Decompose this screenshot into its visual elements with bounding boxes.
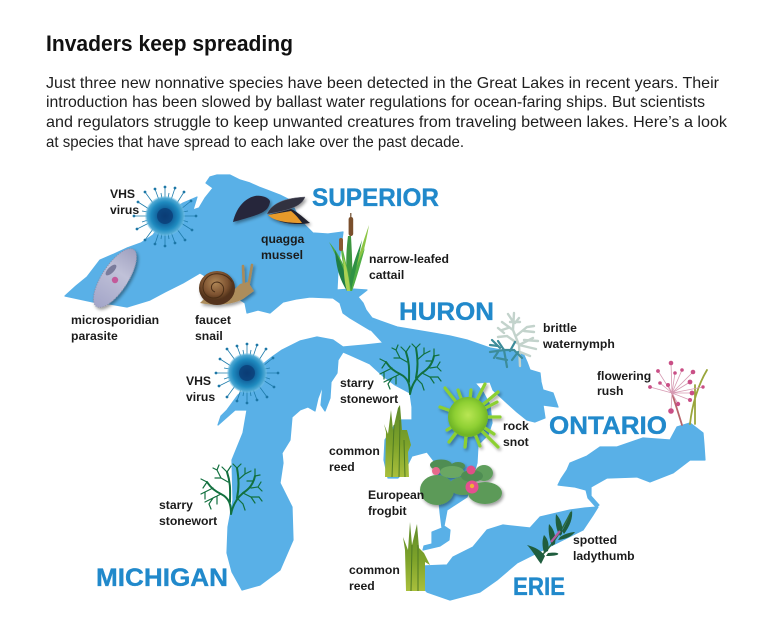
icon: common reed (Erie) <box>403 522 430 591</box>
label: common reed (Huron): common <box>329 444 380 458</box>
label: spotted ladythumb <box>573 533 635 563</box>
label: VHS virus (Michigan): virus <box>186 390 215 404</box>
intro text block: and regulators struggle to keep unwanted creatures from traveling between lakes. Here’s a look <box>46 114 727 131</box>
icon: VHS virus (Michigan) <box>215 343 279 404</box>
label: narrow-leafed cattail: cattail <box>369 268 404 282</box>
heading: Superior: SUPERIOR <box>312 184 439 212</box>
label: narrow-leafed cattail <box>369 252 449 282</box>
label: starry stonewort (Michigan): starry <box>159 498 193 512</box>
label: common reed (Erie) <box>349 563 400 593</box>
label: flowering rush <box>597 369 651 398</box>
label: common reed (Huron): reed <box>329 460 355 474</box>
map of the Great Lakes <box>65 175 705 600</box>
label: starry stonewort (Huron) <box>340 376 398 406</box>
icon: VHS virus (Superior) <box>133 186 197 247</box>
label: brittle waternymph: waternymph <box>542 337 615 351</box>
title: Invaders keep spreading <box>46 31 293 56</box>
icon: rock snot <box>440 384 500 447</box>
intro text block <box>46 75 727 151</box>
label: microsporidian parasite <box>71 313 159 343</box>
icon: microsporidian parasite <box>86 242 144 314</box>
icon: European frogbit <box>420 460 502 505</box>
intro text block: Just three new nonnative species have been detected in the Great Lakes in recent years. Their <box>46 75 719 92</box>
icon: quagga mussel <box>233 196 310 224</box>
label: European frogbit: European <box>368 488 424 502</box>
label: quagga mussel: quagga <box>261 232 305 246</box>
label: VHS virus (Superior) <box>110 187 139 217</box>
label: faucet snail: snail <box>195 329 223 343</box>
label: narrow-leafed cattail: narrow-leafed <box>369 252 449 266</box>
icon: starry stonewort (Huron) <box>380 344 441 394</box>
label: rock snot: rock <box>503 419 529 433</box>
label: spotted ladythumb: spotted <box>573 533 617 547</box>
label: faucet snail: faucet <box>195 313 231 327</box>
intro text block: at species that have spread to each lake over the past decade. <box>46 134 464 151</box>
intro text block: introduction has been slowed by ballast water regulations for ocean-faring ships. But scientists <box>46 94 705 111</box>
label: starry stonewort (Huron): stonewort <box>340 392 398 406</box>
lake shape: Erie <box>413 507 598 600</box>
label: European frogbit <box>368 488 424 518</box>
icon: brittle waternymph <box>490 313 538 367</box>
icon: spotted ladythumb <box>527 510 575 564</box>
label: flowering rush: flowering <box>597 369 651 383</box>
label: quagga mussel: mussel <box>261 248 303 262</box>
label: microsporidian parasite: parasite <box>71 329 118 343</box>
label: microsporidian parasite: microsporidian <box>71 313 159 327</box>
lake shape: Michigan and Huron <box>218 322 558 590</box>
label: brittle waternymph: brittle <box>543 321 577 335</box>
heading: Ontario: ONTARIO <box>549 412 667 440</box>
label: common reed (Erie): common <box>349 563 400 577</box>
label: starry stonewort (Michigan): stonewort <box>159 514 217 528</box>
label: faucet snail <box>195 313 231 343</box>
label: VHS virus (Michigan) <box>186 374 215 404</box>
heading: Erie: ERIE <box>513 573 565 601</box>
label: starry stonewort (Huron): starry <box>340 376 374 390</box>
label: VHS virus (Superior): virus <box>110 203 139 217</box>
icon: flowering rush <box>648 361 707 425</box>
label: starry stonewort (Michigan) <box>159 498 217 528</box>
label: common reed (Erie): reed <box>349 579 375 593</box>
label: quagga mussel <box>261 232 305 262</box>
heading: Michigan: MICHIGAN <box>96 564 228 592</box>
icon: narrow-leafed cattail <box>329 213 369 291</box>
label: flowering rush: rush <box>597 384 623 398</box>
label: VHS virus (Superior): VHS <box>110 187 135 201</box>
label: spotted ladythumb: ladythumb <box>573 549 635 563</box>
label: brittle waternymph <box>542 321 615 351</box>
label: rock snot: snot <box>503 435 529 449</box>
label: common reed (Huron) <box>329 444 380 474</box>
icon: starry stonewort (Michigan) <box>201 464 262 514</box>
lake shape: Ontario and Niagara <box>558 423 705 507</box>
lake shape: Superior <box>65 175 397 330</box>
heading: Huron: HURON <box>399 298 494 326</box>
label: rock snot <box>503 419 529 449</box>
label: European frogbit: frogbit <box>368 504 407 518</box>
icon: common reed (Huron) <box>384 405 411 477</box>
icon: faucet snail <box>199 265 254 305</box>
label: VHS virus (Michigan): VHS <box>186 374 211 388</box>
